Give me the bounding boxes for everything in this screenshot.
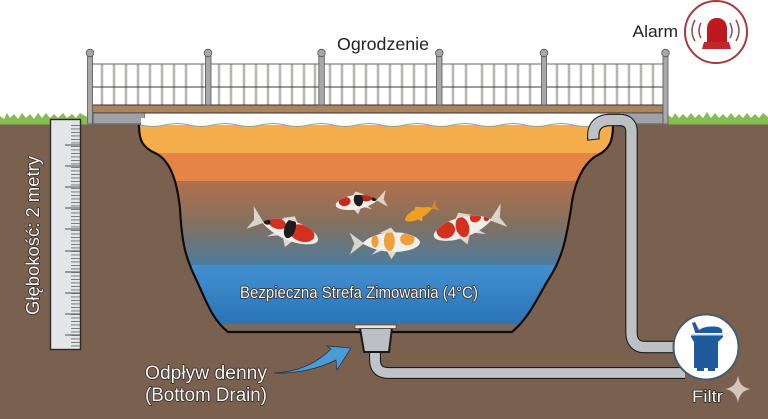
gap above water: [145, 114, 623, 126]
water surface: [141, 118, 597, 126]
fence: [86, 49, 669, 124]
safe zone label: Bezpieczna Strefa Zimowania (4°C): [240, 284, 478, 302]
pond: [130, 118, 630, 334]
depth label: Głębokość: 2 metry: [22, 155, 43, 315]
pond wall: [139, 125, 613, 332]
grass left: [0, 113, 87, 124]
pickets: [102, 64, 653, 105]
fence label: Ogrodzenie: [337, 34, 429, 54]
drain label: (Bottom Drain): [145, 385, 267, 406]
rails: [92, 63, 664, 65]
koi fish 3: [402, 198, 441, 228]
koi fish 2: [336, 190, 388, 214]
bottom pipe: [375, 350, 685, 373]
right pipe: [593, 120, 685, 347]
sparkle: [725, 375, 751, 403]
concrete right: [620, 113, 663, 124]
icon: filter: [674, 314, 738, 380]
drain label: Odpływ denny: [145, 363, 268, 384]
filter label: Filtr: [692, 388, 724, 406]
posts: [86, 49, 669, 124]
concrete left: [93, 113, 145, 124]
bottom drain: [355, 325, 396, 352]
ruler: [50, 120, 80, 350]
grass right: [668, 112, 768, 124]
koi fish 1: [246, 206, 318, 247]
koi fish 5: [434, 204, 508, 244]
alarm label: Alarm: [632, 22, 678, 41]
drain label: [145, 363, 268, 406]
koi fish 4: [350, 227, 420, 260]
ruler ticks: [71, 125, 80, 347]
ground: [0, 124, 768, 419]
deck: [92, 105, 663, 113]
arrow to drain: [274, 346, 351, 373]
icon: alarm: [685, 1, 747, 63]
